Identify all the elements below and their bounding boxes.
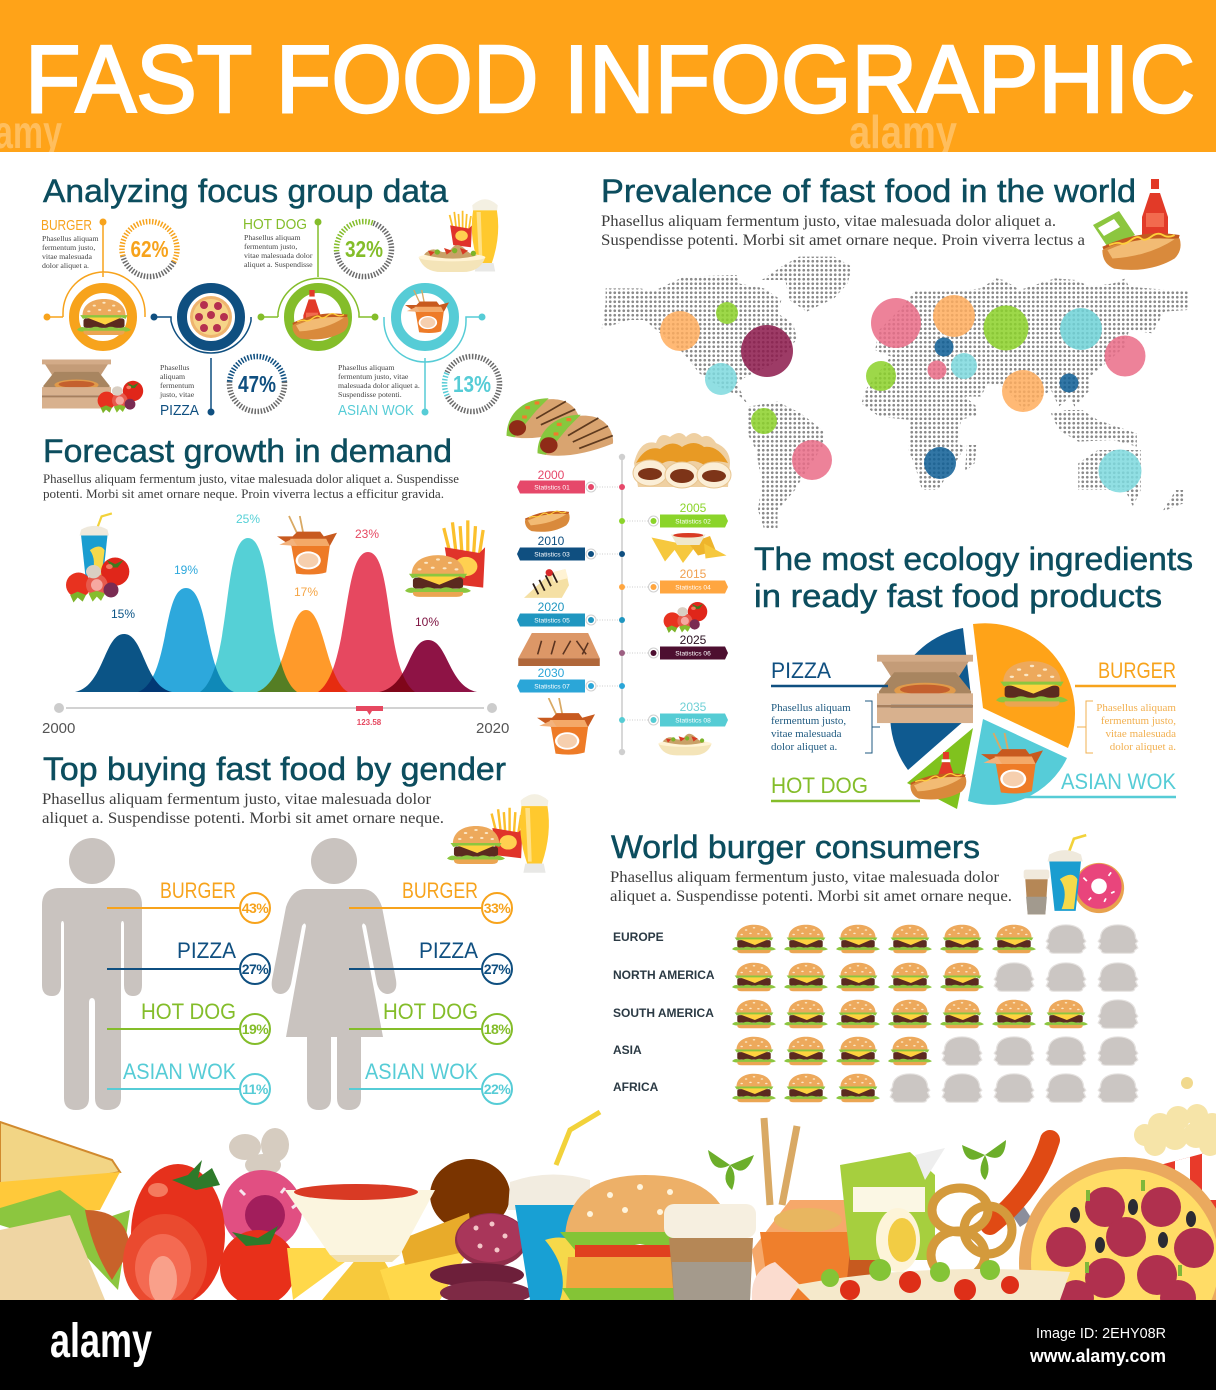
icon: sausage on fork <box>990 1140 1050 1225</box>
row: south america: SOUTH AMERICA <box>613 1006 714 1020</box>
icon: timeline wok <box>537 698 595 755</box>
heading: forecast: Forecast growth in demand <box>43 433 452 469</box>
text: prevalence body: Phasellus aliquam fermentum justo, vitae malesuada dolor aliquet a. <box>601 213 1056 230</box>
bell labels: 25% <box>236 512 260 526</box>
2025 statistics 06 <box>619 633 728 660</box>
figure: man <box>42 838 142 1110</box>
panel: analyzing focus group data <box>41 173 500 419</box>
burger callout: fermentum justo, <box>42 243 95 252</box>
pizza callout: aliquam <box>160 372 185 381</box>
asian wok callout: malesuada dolor aliquet a. <box>338 381 420 390</box>
man hot dog 19%: HOT DOG <box>141 999 236 1024</box>
2005 statistics 02: Statistics 02 <box>675 518 711 526</box>
man burger 43% <box>107 878 270 923</box>
icon: tomatoes <box>123 1160 296 1310</box>
woman pizza 27%: PIZZA <box>419 938 478 963</box>
2035 statistics 08 <box>619 700 728 726</box>
woman pizza 27% <box>349 938 512 984</box>
2005 statistics 02: 2005 <box>680 501 707 515</box>
panel: top buying fast food by gender <box>42 751 549 1110</box>
bell curve chart <box>75 538 477 692</box>
2025 statistics 06: 2025 <box>680 633 707 647</box>
icon: nachos <box>287 1213 473 1300</box>
row: north america: NORTH AMERICA <box>613 968 715 982</box>
icon: timeline hot dog <box>525 511 570 532</box>
pizza circle <box>150 288 251 416</box>
icon: coffee, soda and donut <box>1024 835 1124 914</box>
icon: chocolate egg <box>430 1159 510 1231</box>
burger callout: Phasellus aliquam <box>42 234 99 243</box>
pizza callout: Phasellus <box>160 363 189 372</box>
food illustration strip <box>0 1077 1216 1369</box>
label: burger: dolor aliquet a. <box>1110 741 1176 753</box>
asian wok callout: ASIAN WOK <box>338 402 414 419</box>
icon: ketchup, mustard and hot dog <box>1093 179 1181 270</box>
icon: fork <box>1012 1207 1032 1227</box>
woman hot dog 18%: HOT DOG <box>383 999 478 1024</box>
text: gender body: Phasellus aliquam fermentum justo, vitae malesuada dolor <box>42 791 432 808</box>
row: north america <box>613 963 1138 991</box>
icon: big burger <box>560 1175 730 1300</box>
hot dog callout: HOT DOG <box>243 216 307 233</box>
asian wok circle <box>384 288 486 416</box>
woman asian wok 22%: ASIAN WOK <box>365 1059 478 1084</box>
2035 statistics 08: Statistics 08 <box>675 718 711 724</box>
icon: enchiladas <box>633 433 731 488</box>
text: forecast body: potenti. Morbi sit amet ornare neque. Proin viverra lectus a efficitur gravida. <box>43 486 444 501</box>
man pizza 27% <box>107 938 270 984</box>
heading: gender: Top buying fast food by gender <box>43 751 506 787</box>
2015 statistics 04: 2015 <box>680 567 707 581</box>
label: burger: fermentum justo, <box>1101 715 1176 727</box>
woman hot dog 18%: 18% <box>484 1021 511 1037</box>
figure: woman <box>272 838 396 1110</box>
label: pizza: PIZZA <box>771 658 831 683</box>
bell labels: 17% <box>294 585 318 599</box>
icon: tacos <box>507 398 613 456</box>
2005 statistics 02 <box>619 501 728 528</box>
2000 statistics 01 <box>517 468 625 494</box>
image id: Image ID: 2EHY08R <box>1036 1325 1166 1342</box>
icon: onion rings <box>931 1188 1012 1279</box>
pizza callout: justo, vitae <box>159 390 195 399</box>
gauge: asian wok 13% <box>445 356 500 412</box>
woman burger 33% <box>349 878 512 923</box>
icon: salad bowl <box>795 1259 1070 1301</box>
icon: popcorn box <box>1134 1077 1216 1250</box>
icon: donut <box>222 1170 302 1250</box>
icon: fries, beer and salad <box>419 199 498 272</box>
icon: coffee cup <box>664 1204 756 1300</box>
gauge: pizza 47% <box>230 356 284 411</box>
label: pizza: dolor aliquet a. <box>771 741 838 753</box>
label: burger: BURGER <box>1098 658 1176 683</box>
time slider: 123.58 <box>357 718 382 727</box>
gauge: hot dog 32%: 32% <box>345 236 383 262</box>
text: burger body: aliquet a. Suspendisse potenti. Morbi sit amet ornare neque. <box>610 888 1012 905</box>
man hot dog 19% <box>107 999 270 1044</box>
bell labels: 15% <box>111 607 135 621</box>
pizza callout: PIZZA <box>160 402 199 419</box>
asian wok callout <box>338 363 420 419</box>
dotted world map <box>590 250 1200 540</box>
text: gender body: aliquet a. Suspendisse potenti. Morbi sit amet ornare neque. <box>42 810 444 827</box>
man asian wok 11%: 11% <box>242 1081 269 1097</box>
panel: most ecology ingredients <box>754 541 1193 809</box>
2010 statistics 03: 2010 <box>538 534 565 548</box>
woman pizza 27%: 27% <box>484 961 511 977</box>
website: www.alamy.com <box>1029 1346 1166 1366</box>
bell labels: 19% <box>174 563 198 577</box>
2010 statistics 03 <box>517 534 625 560</box>
icon: timeline cake <box>524 569 569 598</box>
hot dog callout: Phasellus aliquam <box>244 233 301 242</box>
hot dog callout: vitae malesuada dolor <box>244 251 313 260</box>
label: burger: vitae malesuada <box>1105 728 1176 740</box>
man hot dog 19%: 19% <box>242 1021 269 1037</box>
heading: world burger consumers: World burger consumers <box>611 829 980 865</box>
2025 statistics 06: Statistics 06 <box>675 650 711 658</box>
burger callout: vitae malesuada <box>42 252 93 261</box>
bell labels: 10% <box>415 615 439 629</box>
burger callout: dolor aliquet a. <box>42 261 89 270</box>
man pizza 27%: PIZZA <box>177 938 236 963</box>
bell labels: 23% <box>355 527 379 541</box>
pie chart <box>890 623 1075 809</box>
2000 statistics 01: 2000 <box>538 468 565 482</box>
text: forecast body: Phasellus aliquam fermentum justo, vitae malesuada dolor aliquet a. Suspendisse <box>43 471 459 486</box>
map bubbles <box>660 295 1146 492</box>
row: asia <box>613 1037 1138 1065</box>
pizza callout <box>159 363 199 419</box>
icon: timeline nachos <box>652 533 726 563</box>
label: pizza: Phasellus aliquam <box>771 702 851 714</box>
panel: prevalence of fast food in the world <box>590 173 1200 540</box>
2020 statistics 05: 2020 <box>538 600 565 614</box>
icon: wok carton <box>752 1200 910 1300</box>
2030 statistics 07 <box>517 666 625 692</box>
label: burger: Phasellus aliquam <box>1096 702 1176 714</box>
asian wok callout: Suspendisse potenti. <box>338 390 402 399</box>
2020 statistics 05 <box>517 600 625 626</box>
label: asian wok: ASIAN WOK <box>1061 769 1176 794</box>
gauge: hot dog 32% <box>336 222 391 277</box>
hot dog callout: aliquet a. Suspendisse <box>244 260 313 269</box>
time slider: 2020 <box>476 720 509 737</box>
label: hot dog: HOT DOG <box>771 773 868 798</box>
woman burger 33%: BURGER <box>402 878 478 903</box>
icon: juice carton <box>840 1148 945 1260</box>
bell labels <box>111 512 439 629</box>
time slider <box>42 703 509 737</box>
2030 statistics 07: 2030 <box>538 666 565 680</box>
row: asia: ASIA <box>613 1043 642 1057</box>
row: south america <box>613 1000 1138 1028</box>
icon: pizza box and tomatoes <box>42 360 143 413</box>
woman burger 33%: 33% <box>484 900 511 916</box>
man burger 43%: 43% <box>242 900 269 916</box>
icon: timeline salad <box>658 734 712 755</box>
2000 statistics 01: Statistics 01 <box>534 484 570 492</box>
icon: burger, fries and beer <box>447 794 549 873</box>
label: pizza <box>771 658 888 753</box>
icon: salami <box>430 1213 532 1305</box>
gauge: pizza 47%: 47% <box>238 371 276 397</box>
burger callout <box>41 217 145 346</box>
hot dog callout <box>243 216 378 346</box>
logo: alamy: alamy <box>50 1315 152 1368</box>
2035 statistics 08: 2035 <box>680 700 707 714</box>
heading: ecology: in ready fast food products <box>754 578 1162 614</box>
icon: wok box <box>277 516 337 575</box>
icon: soda and tomatoes <box>66 513 129 602</box>
heading: ecology <box>754 541 1193 614</box>
text: prevalence body: Suspendisse potenti. Morbi sit amet ornare neque. Proin viverra lectus a <box>601 232 1085 249</box>
icon: pizza <box>1019 1157 1216 1369</box>
panel: forecast growth in demand <box>42 433 509 737</box>
gauge: burger 62%: 62% <box>130 236 168 262</box>
gauge: burger 62% <box>122 222 177 277</box>
row: africa: AFRICA <box>613 1080 659 1094</box>
man pizza 27%: 27% <box>242 961 269 977</box>
hot dog callout: fermentum justo, <box>244 242 297 251</box>
pizza callout: fermentum <box>160 381 194 390</box>
icon: burger and fries <box>405 520 485 597</box>
row: europe: EUROPE <box>613 930 664 944</box>
2015 statistics 04: Statistics 04 <box>675 584 711 592</box>
man asian wok 11% <box>107 1059 270 1104</box>
watermark strip <box>0 1300 1216 1390</box>
row: europe <box>613 925 1138 953</box>
heading: analyzing focus group data: Analyzing focus group data <box>43 173 448 209</box>
burger callout: BURGER <box>41 217 92 234</box>
icon: soda cup <box>508 1112 600 1300</box>
woman hot dog 18% <box>349 999 512 1044</box>
timeline axis <box>619 454 625 755</box>
man asian wok 11%: ASIAN WOK <box>123 1059 236 1084</box>
man burger 43%: BURGER <box>160 878 236 903</box>
icon: sauce cup <box>285 1184 435 1262</box>
icon: egg <box>876 1208 920 1272</box>
icon: closed pizza box <box>518 633 600 666</box>
label: pizza: vitae malesuada <box>771 728 842 740</box>
pie pizza box <box>877 655 973 723</box>
icon: mushrooms <box>229 1128 289 1194</box>
row: africa <box>613 1074 1138 1102</box>
icon: chopsticks <box>764 1118 797 1205</box>
gauge: asian wok 13%: 13% <box>453 371 491 397</box>
2015 statistics 04 <box>619 567 728 594</box>
pie wok <box>981 733 1043 794</box>
heading: prevalence: Prevalence of fast food in the world <box>601 173 1136 209</box>
time slider: 2000 <box>42 720 75 737</box>
woman asian wok 22%: 22% <box>484 1081 511 1097</box>
2020 statistics 05: Statistics 05 <box>534 618 570 624</box>
icon: tomatoes timeline <box>664 602 707 633</box>
panel: timeline <box>507 398 731 755</box>
asian wok callout: fermentum justo, vitae <box>338 372 409 381</box>
header banner <box>0 0 1216 152</box>
panel: world burger consumers <box>610 829 1138 1102</box>
heading: ecology: The most ecology ingredients <box>754 541 1193 577</box>
icon: sandwich <box>0 1122 130 1300</box>
pie burger <box>996 661 1068 707</box>
2030 statistics 07: Statistics 07 <box>534 684 570 690</box>
woman asian wok 22% <box>349 1059 512 1104</box>
icon: basil <box>708 1140 1006 1190</box>
pie hot dog <box>910 752 966 800</box>
label: pizza: fermentum justo, <box>771 715 846 727</box>
watermark: header alamy right: alamy <box>849 106 957 158</box>
asian wok callout: Phasellus aliquam <box>338 363 395 372</box>
2010 statistics 03: Statistics 03 <box>534 552 570 558</box>
icon: shrimp <box>752 1262 800 1300</box>
text: burger body: Phasellus aliquam fermentum justo, vitae malesuada dolor <box>610 869 1000 886</box>
label: burger <box>1075 658 1176 753</box>
